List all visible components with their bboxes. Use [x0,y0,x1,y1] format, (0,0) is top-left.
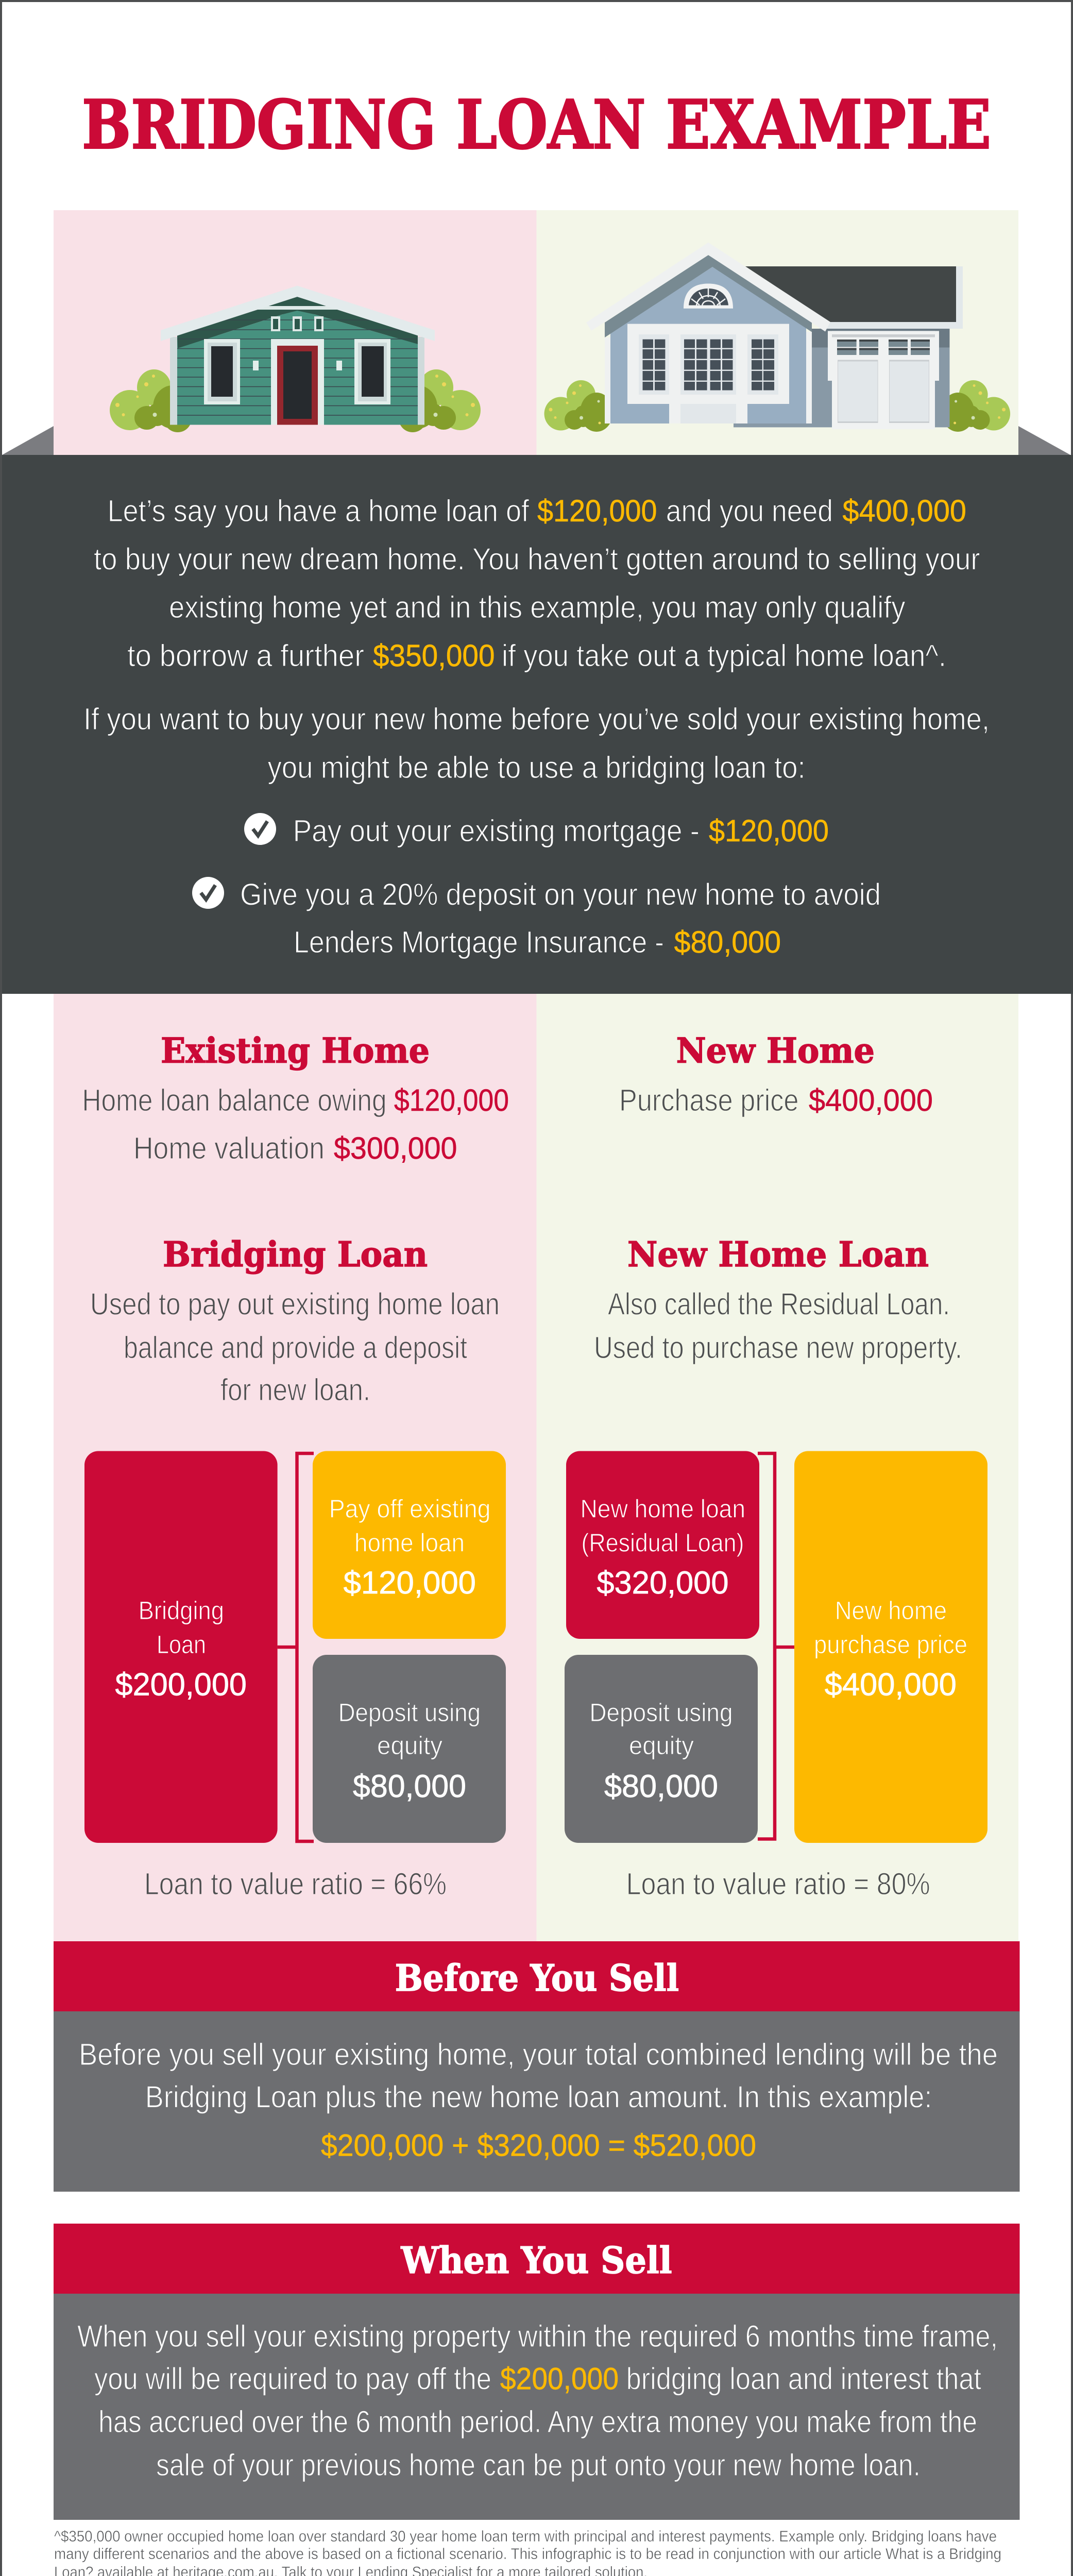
before you sell body text: $200,000 + $320,000 = $520,000 [321,2128,756,2163]
panel: house illustrations [2,210,1070,455]
loan to value ratio 66%: Loan to value ratio = 66% [144,1867,447,1901]
before you sell body text: Bridging Loan plus the new home loan amount. In this example: [145,2079,932,2114]
new home figures: $400,000 [809,1083,933,1117]
box: deposit using equity (new): Deposit using [589,1698,733,1727]
before you sell body text [79,2037,998,2163]
intro paragraph: $350,000 [373,638,495,673]
fold triangle right [1018,426,1070,455]
existing home figures: Home valuation [133,1131,325,1165]
new home figures [619,1083,933,1117]
intro paragraph: if you take out a typical home loan^. [502,638,946,673]
footnote: ^$350,000 owner occupied home loan over standard 30 year home loan term with principal and interest payments. Example only. Bridging loans have [54,2528,997,2545]
panel: before you sell [54,1941,1020,2192]
when you sell body text [77,2319,998,2482]
panel: introduction [2,455,1073,994]
box: deposit using equity (existing): Deposit using [338,1698,481,1727]
existing home figures: Home loan balance owing [82,1083,387,1117]
existing home figures [82,1083,509,1165]
heading: existing home: Existing Home [161,1030,430,1071]
box: deposit using equity (new) [565,1655,758,1843]
when you sell body text: bridging loan and interest that [626,2362,981,2396]
box: pay off existing home loan: $120,000 [344,1565,476,1601]
intro paragraph [94,494,980,673]
green background new home [537,210,1018,455]
bridging loan intro sentence: If you want to buy your new home before you’ve sold your existing home, [83,702,990,736]
box: deposit using equity (existing): $80,000 [353,1769,466,1804]
intro paragraph: $400,000 [843,494,966,528]
box: new home purchase price: purchase price [814,1630,967,1659]
bridging loan description: for new loan. [220,1372,370,1407]
bridging loan intro sentence [83,702,990,785]
before you sell body text: Before you sell your existing home, your total combined lending will be the [79,2037,998,2072]
intro paragraph: to borrow a further [127,638,364,673]
heading: new home loan: New Home Loan [627,1234,929,1275]
intro paragraph: existing home yet and in this example, you may only qualify [169,590,906,624]
checklist item: deposit [192,877,881,959]
box: new home loan amount: New home loan [580,1494,745,1523]
box: new home purchase price: $400,000 [825,1667,957,1703]
checklist item: pay out mortgage: Pay out your existing mortgage - [293,814,700,848]
heading: when you sell: When You Sell [401,2239,672,2282]
fold triangle left [2,426,54,455]
box: bridging loan amount: Loan [157,1630,206,1659]
box: pay off existing home loan: Pay off existing [329,1494,490,1523]
checklist item: deposit: Give you a 20% deposit on your new home to avoid [240,877,881,912]
new home loan description: Also called the Residual Loan. [608,1287,950,1321]
existing home figures: $120,000 [394,1083,509,1117]
heading: new home: New Home [676,1030,875,1071]
bridging loan intro sentence: you might be able to use a bridging loan to: [268,750,806,785]
box: pay off existing home loan [313,1451,506,1639]
box: new home purchase price: New home [835,1596,947,1625]
bracket: new home loan [758,1453,794,1839]
when you sell body text: $200,000 [500,2362,619,2396]
box: bridging loan amount [84,1451,278,1843]
box: deposit using equity (new): $80,000 [604,1769,718,1804]
pink background existing home [54,210,537,455]
new home figures: Purchase price [619,1083,798,1117]
new home loan description: Used to purchase new property. [594,1330,962,1365]
panel: when you sell [54,2224,1020,2520]
intro paragraph: Let’s say you have a home loan of [108,494,529,528]
box: new home loan amount [566,1451,759,1639]
box: deposit using equity (new): equity [629,1731,694,1760]
box: deposit using equity (existing): equity [377,1731,442,1760]
when you sell body text: you will be required to pay off the [94,2362,491,2396]
heading: before you sell: Before You Sell [395,1956,679,1999]
box: new home purchase price [794,1451,987,1843]
bracket: bridging loan [278,1453,314,1841]
loan to value ratio 80%: Loan to value ratio = 80% [626,1867,930,1901]
box: deposit using equity (existing) [313,1655,506,1843]
when you sell body text: sale of your previous home can be put onto your new home loan. [156,2448,921,2482]
checklist item: deposit: Lenders Mortgage Insurance - [294,925,664,959]
intro paragraph: $120,000 [537,494,657,528]
intro paragraph: and you need [666,494,833,528]
box: pay off existing home loan: home loan [354,1528,465,1557]
heading: bridging loan: Bridging Loan [163,1234,428,1275]
box: new home loan amount: (Residual Loan) [581,1528,744,1557]
footnote [54,2528,1001,2576]
panel: new home column [537,994,1018,1941]
bridging loan description: Used to pay out existing home loan [90,1287,500,1321]
checklist item: pay out mortgage: $120,000 [709,814,829,848]
box: bridging loan amount: $200,000 [115,1667,247,1703]
panel: existing home column [54,994,537,1941]
icon: new home [544,243,1010,432]
box: bridging loan amount: Bridging [139,1596,224,1625]
existing home figures: $300,000 [334,1131,457,1165]
footnote: many different scenarios and the above is based on a fictional scenario. This infographic is to be read in conjunction with our article What is a Bridging [54,2546,1001,2563]
bridging loan description: balance and provide a deposit [124,1330,467,1365]
bridging loan description [90,1287,500,1407]
checklist item: deposit: $80,000 [674,925,781,959]
intro paragraph: to buy your new dream home. You haven’t gotten around to selling your [94,542,980,576]
icon: existing home [110,285,481,432]
new home loan description [594,1287,962,1365]
box: new home loan amount: $320,000 [597,1565,728,1601]
